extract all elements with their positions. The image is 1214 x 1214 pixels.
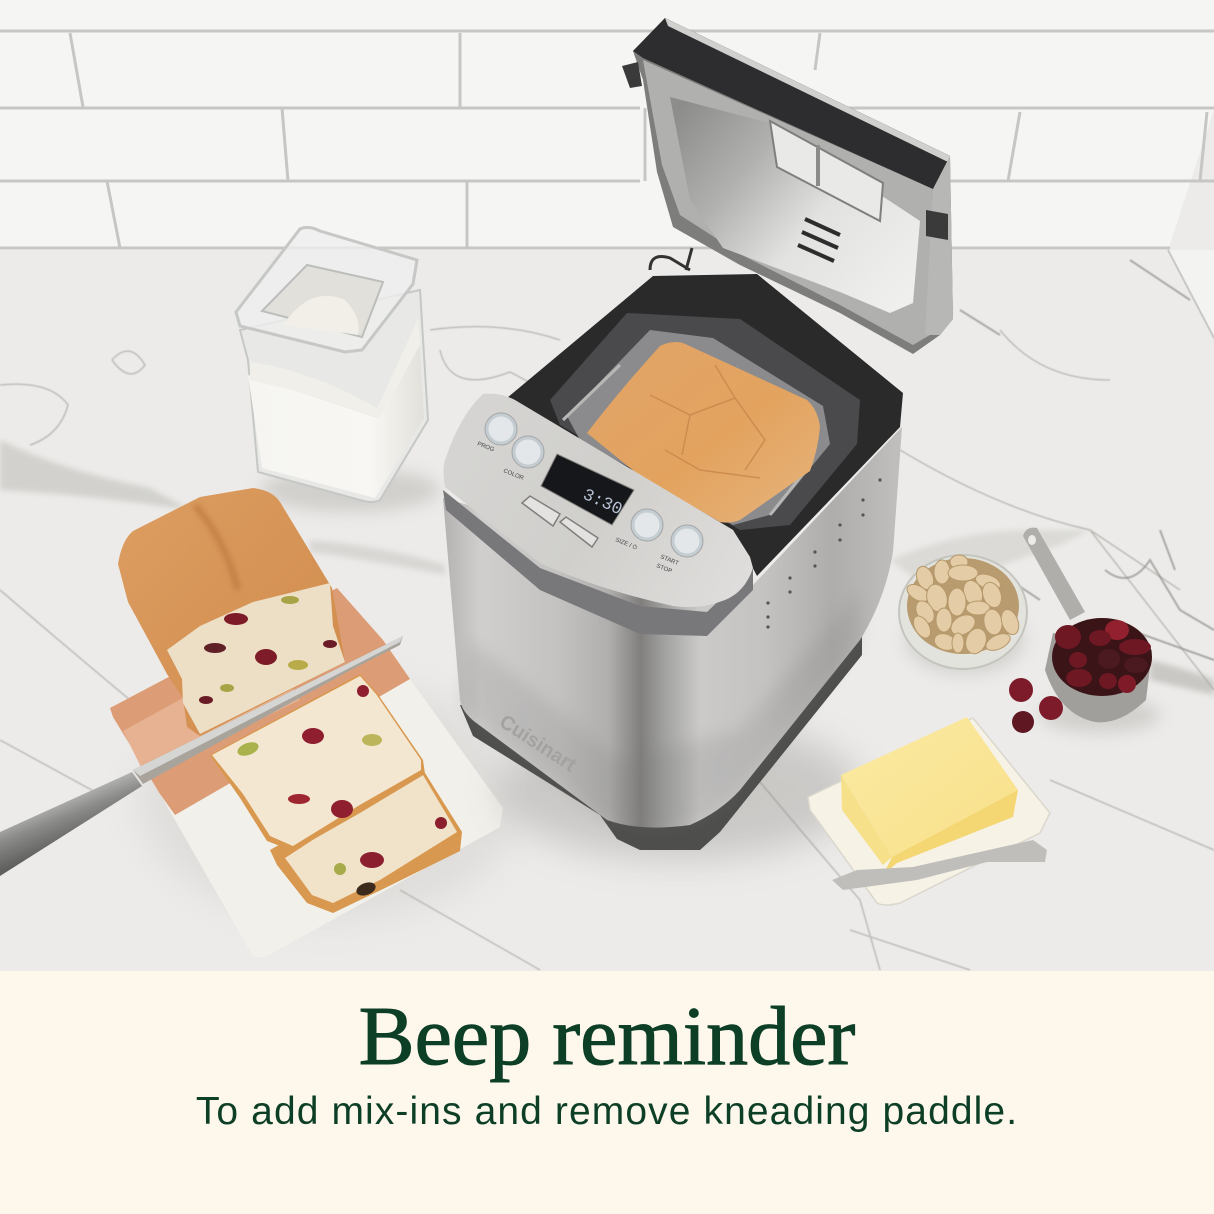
control panel rim bbox=[443, 490, 753, 636]
plate of butter bbox=[808, 717, 1050, 905]
sliced loaf bbox=[118, 488, 345, 736]
knife bbox=[0, 636, 403, 876]
machine body bbox=[443, 427, 902, 828]
heading: Beep reminder bbox=[359, 990, 855, 1083]
control labels: PROG bbox=[476, 441, 495, 454]
buttons bbox=[487, 415, 701, 555]
control labels: COLOR bbox=[502, 468, 525, 482]
power cord bbox=[650, 248, 692, 270]
display bbox=[541, 454, 634, 525]
bread slices bbox=[210, 674, 462, 913]
wall tiles bbox=[0, 0, 1214, 340]
vent holes bbox=[766, 478, 882, 629]
control panel bbox=[444, 394, 753, 607]
bread machine bbox=[443, 274, 903, 860]
subheading: To add mix-ins and remove kneading paddle. bbox=[196, 1090, 1018, 1133]
caption panel bbox=[0, 971, 1214, 1214]
brand mark: Cuisinart bbox=[495, 711, 580, 777]
control labels: STOP bbox=[655, 563, 673, 575]
baking pan bbox=[567, 330, 830, 525]
pan handles bbox=[563, 365, 806, 515]
control labels: SIZE / ⏻ bbox=[614, 536, 639, 552]
countertop marble bbox=[0, 250, 1214, 971]
open lid bbox=[622, 18, 953, 354]
measuring cup of cranberries bbox=[1009, 528, 1160, 733]
machine base bbox=[460, 620, 862, 850]
control labels: START bbox=[659, 554, 680, 567]
bowl of pistachios bbox=[899, 555, 1027, 675]
bread machine: 3:30 bbox=[580, 486, 625, 520]
control labels bbox=[476, 441, 680, 575]
cutting board bbox=[110, 588, 520, 957]
glass jar of flour bbox=[236, 227, 440, 512]
top opening bbox=[507, 274, 903, 576]
loaf in pan bbox=[587, 342, 820, 523]
photo: bread machine scene bbox=[0, 18, 1214, 971]
